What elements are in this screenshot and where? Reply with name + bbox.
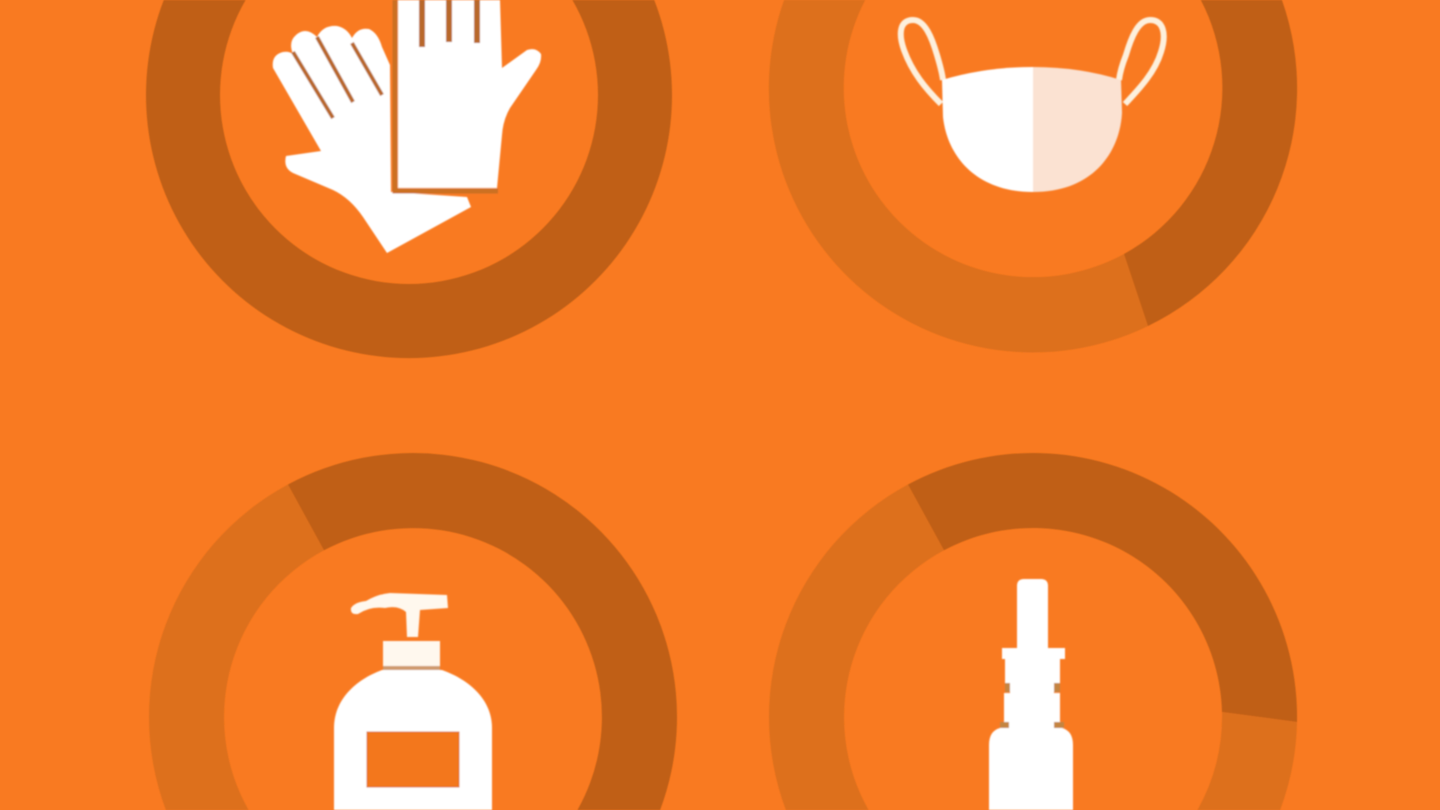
left glove — [273, 26, 471, 253]
right glove — [398, 0, 541, 188]
ring segment, light share — [149, 484, 324, 810]
panel: face mask — [769, 0, 1297, 352]
panel: nasal spray — [769, 453, 1297, 810]
icon: face mask — [901, 20, 1164, 192]
bottle label — [367, 732, 459, 787]
ring segment, dark share — [288, 453, 677, 810]
donut ring: mask — [769, 0, 1297, 352]
left glove finger slits — [293, 37, 382, 118]
ear loops — [901, 20, 1164, 104]
panel: soap pump — [149, 453, 677, 810]
neck shadow — [383, 666, 440, 670]
bottle body — [334, 670, 492, 810]
icon: pump bottle — [334, 593, 492, 810]
donut ring: spray — [769, 453, 1297, 810]
mask right half — [1033, 67, 1122, 192]
glove gap shadow — [395, 0, 498, 191]
ring segment, dark share — [1124, 0, 1297, 326]
panel: gloves — [146, 0, 672, 358]
donut ring: soap — [149, 453, 677, 810]
collar — [383, 641, 440, 666]
ring segment, light share — [769, 0, 1148, 352]
bottle silhouette — [989, 579, 1073, 810]
neck notches — [1000, 683, 1064, 728]
pump head — [351, 593, 448, 637]
ring segment, light share right — [1198, 712, 1297, 810]
mask left half — [942, 67, 1033, 192]
right glove finger slits — [419, 0, 480, 47]
icon: nasal spray bottle — [989, 579, 1073, 810]
donut ring: gloves, fully dark — [146, 0, 672, 358]
icon: gloves — [273, 0, 541, 253]
ring segment, light share left — [769, 484, 944, 810]
ring segment, dark share — [908, 453, 1297, 722]
